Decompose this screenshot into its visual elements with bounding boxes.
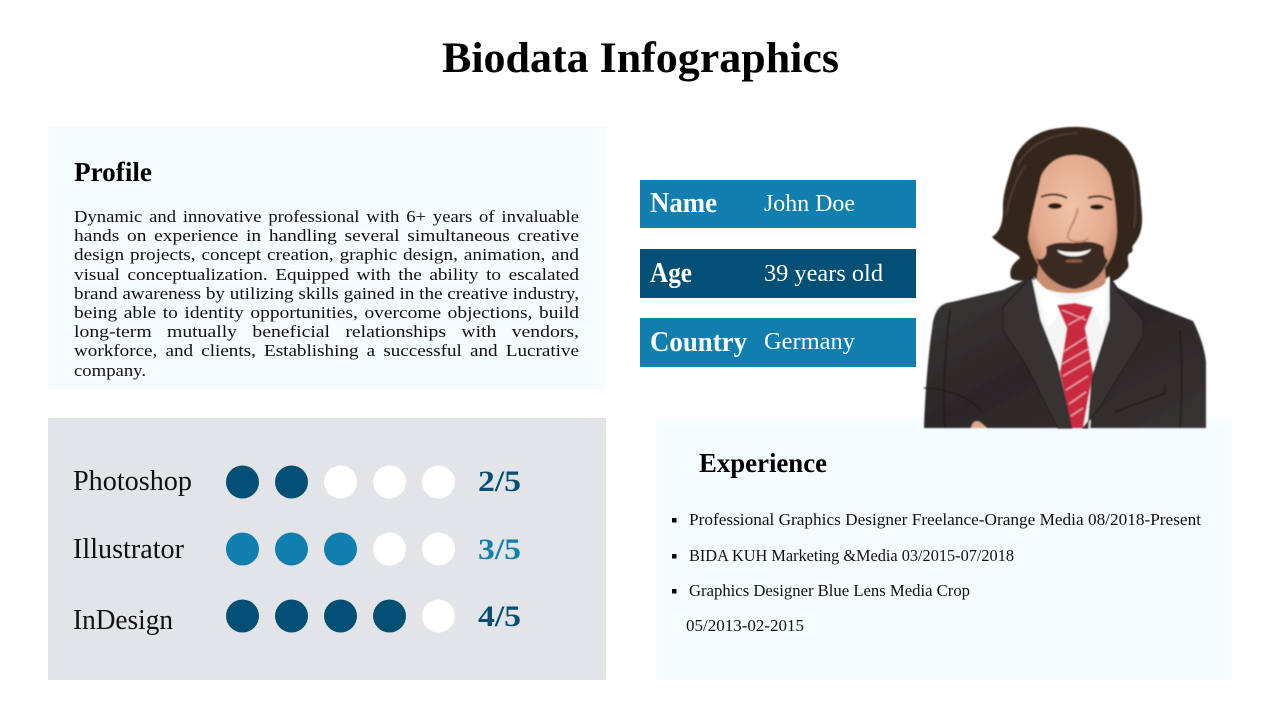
profile body text: design projects, concept creation, graphic design, animation, and <box>74 245 580 264</box>
shirt <box>1032 276 1112 428</box>
skill row: Illustrator: 3/5 <box>478 533 521 566</box>
beard <box>1036 242 1108 289</box>
experience list: 05/2013-02-2015 <box>686 616 804 635</box>
collar <box>1034 276 1110 330</box>
info row: age: 39 years old <box>764 261 883 287</box>
heading: experience: Experience <box>699 448 827 478</box>
profile body text: Dynamic and innovative professional with 6+ years of invaluable <box>74 207 579 226</box>
profile body text <box>74 207 580 380</box>
portrait photo <box>924 124 1206 428</box>
profile body text: company. <box>74 361 146 380</box>
hair <box>992 127 1142 282</box>
profile body text: being able to identity opportunities, overcome objections, build <box>74 303 580 322</box>
info row: name <box>640 180 916 228</box>
nose shadow <box>1068 208 1088 242</box>
skill row: Photoshop: 2/5 <box>478 465 521 498</box>
info row: age: Age <box>650 258 692 289</box>
heading: profile: Profile <box>74 157 152 187</box>
skill row: InDesign <box>73 600 521 636</box>
profile body text: hands on experience in handling several simultaneous creative <box>74 226 579 245</box>
lower lip patch <box>1065 259 1083 263</box>
experience list: Graphics Designer Blue Lens Media Crop <box>689 581 970 600</box>
panel: profile <box>48 127 606 389</box>
smile <box>1057 249 1091 256</box>
panel: skills <box>48 418 606 680</box>
tie <box>1057 303 1093 428</box>
panel: experience <box>656 418 1232 680</box>
skill row: InDesign: 4/5 <box>478 600 521 633</box>
profile body text: workforce, and clients, Establishing a successful and Lucrative <box>74 341 579 360</box>
hand <box>971 421 987 428</box>
face <box>1028 155 1117 288</box>
info row: name: John Doe <box>764 191 855 217</box>
skill row: InDesign: InDesign <box>73 604 173 636</box>
info row: name: Name <box>650 188 717 219</box>
profile body text: visual conceptualization. Equipped with the ability to escalated <box>74 265 580 284</box>
lapels <box>1003 277 1072 428</box>
experience list: BIDA KUH Marketing &Media 03/2015-07/2018 <box>689 546 1014 565</box>
skill row: Photoshop <box>73 465 521 498</box>
skill row: Illustrator: Illustrator <box>73 533 184 565</box>
suit <box>924 277 1206 428</box>
profile body text: long-term mutually beneficial relationships with vendors, <box>74 322 579 341</box>
skill row: Illustrator <box>73 532 521 566</box>
experience list: Professional Graphics Designer Freelance-Orange Media 08/2018-Present <box>689 510 1201 529</box>
info row: age <box>640 249 916 298</box>
info row: country: Country <box>650 327 747 358</box>
title: Biodata Infographics <box>442 35 839 82</box>
profile body text: brand awareness by utilizing skills gained in the creative industry, <box>74 284 579 303</box>
neck <box>1036 255 1106 293</box>
jacket details <box>924 310 1182 428</box>
skill row: Photoshop: Photoshop <box>73 465 192 497</box>
info row: country: Germany <box>764 329 855 355</box>
eyes and brows <box>1041 194 1112 200</box>
experience list <box>672 510 1201 635</box>
info row: country <box>640 318 916 367</box>
